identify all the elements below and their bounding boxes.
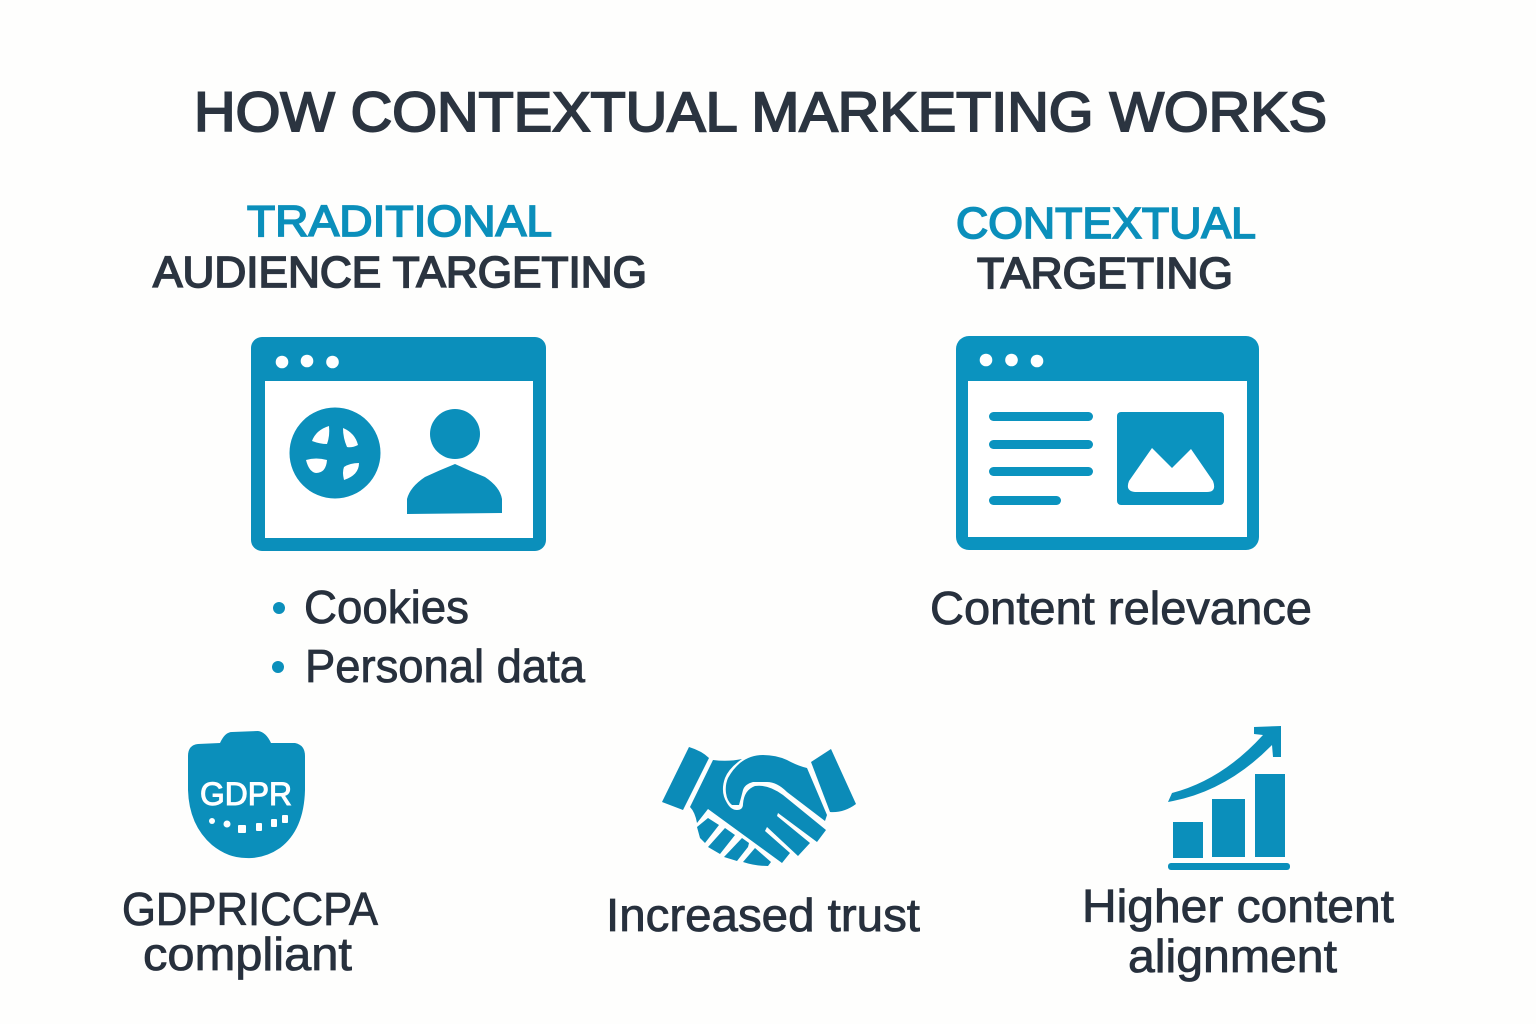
heading: traditional audience targeting	[153, 197, 647, 297]
text: GDPR/CCPA compliant: compliant	[143, 928, 352, 980]
heading: contextual targeting	[956, 199, 1256, 298]
list: cookies and personal data: Cookies	[304, 581, 469, 633]
icon: GDPR shield	[188, 731, 305, 858]
heading: traditional audience targeting: TRADITIONAL	[247, 197, 552, 246]
heading: traditional audience targeting: AUDIENCE TARGETING	[153, 248, 647, 297]
icon: handshake	[662, 747, 856, 866]
list: cookies and personal data: Personal data	[305, 640, 585, 692]
text: higher content alignment: alignment	[1128, 930, 1337, 982]
heading: contextual targeting: TARGETING	[977, 249, 1233, 298]
title: HOW CONTEXTUAL MARKETING WORKS	[194, 80, 1327, 143]
text: increased trust: Increased trust	[606, 889, 920, 941]
text: GDPR/CCPA compliant	[122, 883, 378, 980]
text: GDPR/CCPA compliant: GDPRICCPA	[122, 883, 378, 935]
icon: browser with text lines and image	[956, 336, 1259, 550]
heading: contextual targeting: CONTEXTUAL	[956, 199, 1256, 248]
icon: browser with globe and person	[251, 337, 546, 551]
icon: GDPR shield: GDPR	[200, 776, 292, 812]
list: cookies and personal data	[272, 581, 585, 692]
text: higher content alignment: Higher content	[1082, 880, 1394, 932]
text: content relevance: Content relevance	[930, 582, 1312, 634]
text: higher content alignment	[1082, 880, 1394, 982]
icon: growth chart with arrow	[1168, 726, 1290, 870]
